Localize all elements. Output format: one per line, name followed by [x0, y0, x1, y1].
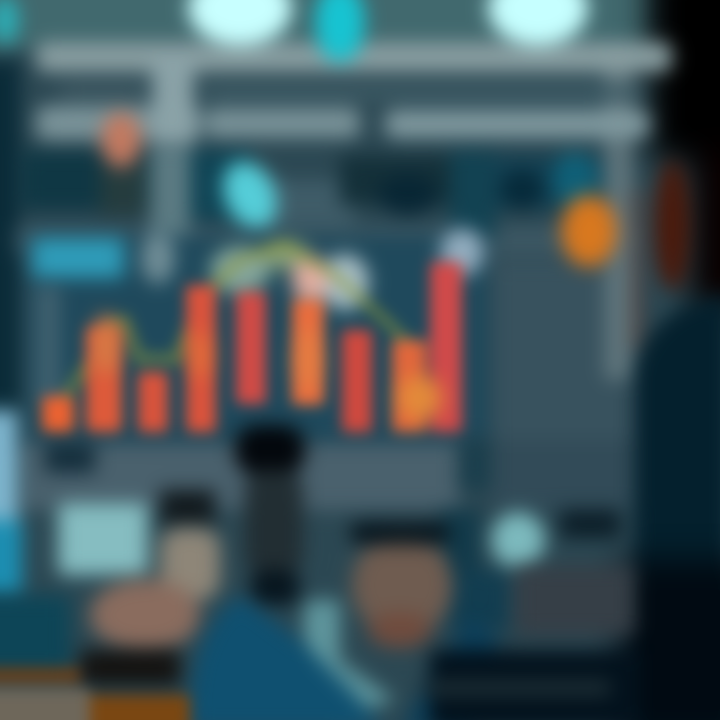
panel background — [28, 236, 488, 441]
torso — [635, 295, 720, 720]
chart panel — [28, 228, 488, 441]
bars — [42, 262, 462, 432]
table: lower left — [0, 650, 190, 720]
title — [36, 42, 672, 145]
orange marker: title — [101, 112, 141, 168]
chart grey block — [141, 232, 175, 284]
top glow lights — [0, 0, 588, 62]
red glow on the right — [654, 160, 690, 290]
background: screen panels — [0, 0, 650, 510]
dark lower band — [430, 650, 640, 720]
bar highlights — [92, 315, 442, 420]
lower text band — [425, 680, 610, 696]
dark screen edge — [650, 0, 720, 310]
cyan marker — [213, 153, 287, 237]
chart top glow — [210, 228, 484, 310]
hand shape — [90, 528, 220, 651]
dark band above face — [350, 522, 450, 544]
dark patches — [45, 440, 620, 630]
orange marker: right — [561, 195, 617, 267]
brown table — [90, 695, 190, 720]
dark gap — [80, 650, 180, 685]
light column left — [0, 410, 22, 595]
phone: dark vertical object — [235, 425, 305, 605]
grey block right lower — [515, 565, 635, 635]
band: dark teal row under title — [20, 50, 644, 380]
orange table edge — [0, 668, 80, 682]
blue shirt — [190, 595, 500, 720]
pale teal screen — [58, 503, 148, 575]
chart legend block — [32, 238, 124, 278]
person silhouette: right side — [620, 160, 720, 720]
pale teal strip — [300, 600, 395, 720]
blue block lower left — [0, 595, 70, 675]
grey table — [0, 688, 90, 720]
pale teal dot — [491, 512, 545, 568]
face blur — [352, 533, 452, 648]
trend line — [60, 245, 410, 405]
